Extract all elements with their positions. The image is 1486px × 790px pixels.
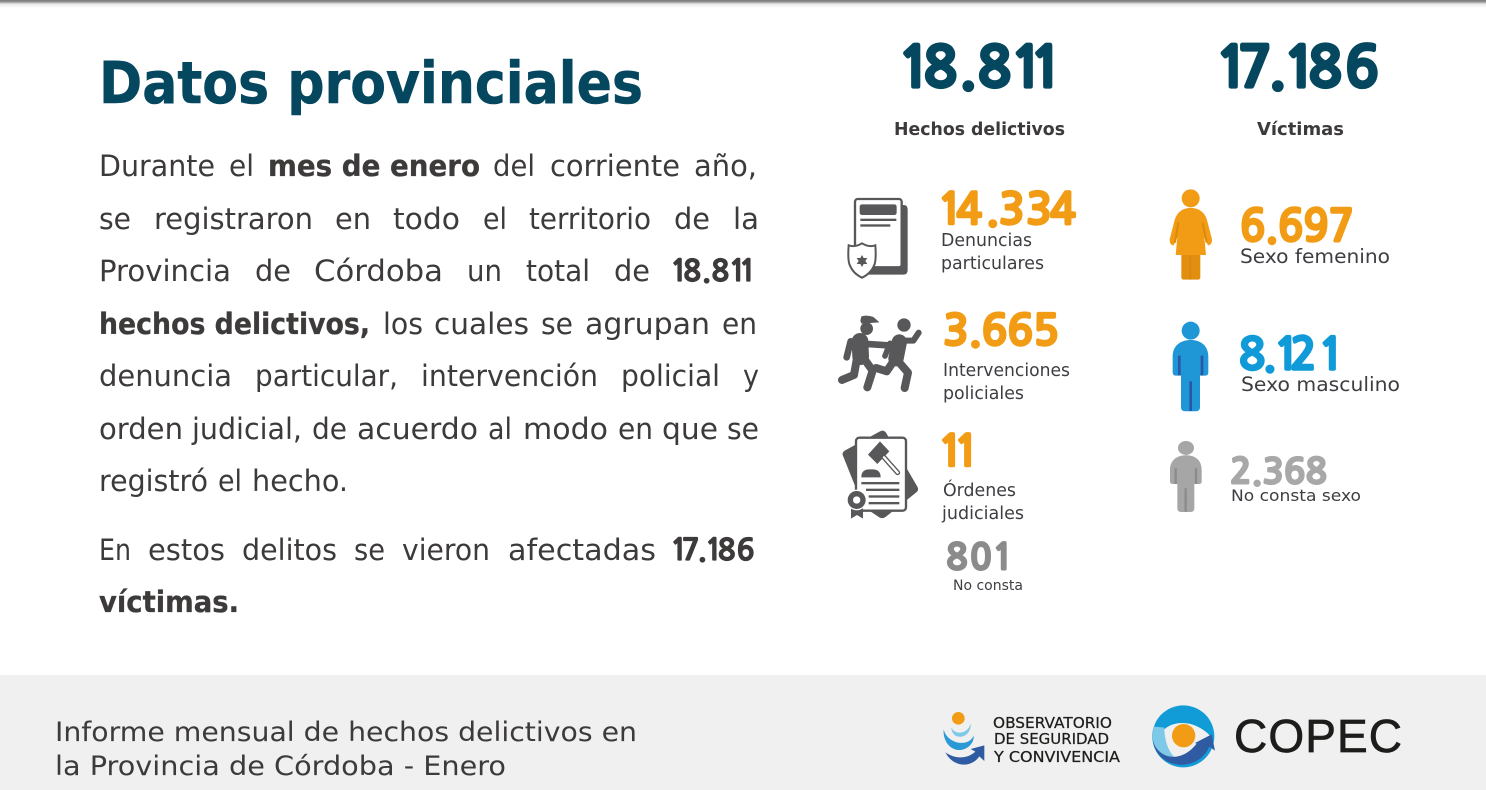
text block: main paragraph: hechos delictivos, xyxy=(99,307,370,341)
stat: sexo masculino xyxy=(1239,332,1400,396)
stat: denuncias particulares: Denuncias xyxy=(941,230,1032,251)
text block: victims paragraph: En xyxy=(99,533,131,567)
stat: denuncias particulares: particulares xyxy=(941,253,1044,274)
heading: victimas: Víctimas xyxy=(1257,119,1344,140)
stat: intervenciones policiales: policiales xyxy=(943,383,1024,404)
text block: main paragraph: y xyxy=(743,359,759,393)
stat: no consta xyxy=(946,540,1023,594)
text block: main paragraph: territorio xyxy=(529,202,651,236)
text block: main paragraph: año, xyxy=(694,149,757,183)
text block: main paragraph: los xyxy=(383,307,423,341)
text block: main paragraph: se xyxy=(99,202,131,236)
text block: main paragraph: Provincia xyxy=(99,254,231,288)
text block: victims paragraph: estos xyxy=(148,533,225,567)
text block: main paragraph: total xyxy=(526,254,590,288)
text block: main paragraph: Durante xyxy=(99,149,215,183)
stat: sexo femenino xyxy=(1240,204,1390,268)
text block: main paragraph: registraron xyxy=(154,202,313,236)
stat: sexo femenino: 6.697 xyxy=(1240,204,1354,248)
stat: no consta: 801 xyxy=(946,540,1014,576)
logo: observatorio: DE SEGURIDAD xyxy=(994,730,1109,748)
text block: main paragraph xyxy=(99,149,759,498)
text block: main paragraph: orden xyxy=(99,412,183,446)
footer text xyxy=(55,717,637,782)
text block: victims paragraph: víctimas. xyxy=(99,585,239,619)
stat: ordenes judiciales xyxy=(938,431,1024,524)
stat: intervenciones policiales xyxy=(943,311,1070,404)
footer text: la Provincia de Córdoba - Enero xyxy=(55,751,506,782)
stat: ordenes judiciales: Órdenes xyxy=(943,479,1016,501)
text block: main paragraph: hecho. xyxy=(252,464,348,498)
text block: main paragraph: agrupan xyxy=(585,307,710,341)
text block: main paragraph: la xyxy=(733,202,759,236)
text block: victims paragraph: vieron xyxy=(402,533,490,567)
text block: main paragraph: 18.811 xyxy=(670,257,757,286)
text block: main paragraph: del xyxy=(493,149,535,183)
icon: police officer and suspect running xyxy=(842,316,919,388)
text block: main paragraph: que xyxy=(662,412,718,446)
logo: observatorio: Y CONVIVENCIA xyxy=(993,748,1120,766)
text block: main paragraph: mes de enero xyxy=(268,149,480,183)
text block: main paragraph: todo xyxy=(393,202,460,236)
text block: main paragraph: en xyxy=(618,412,653,446)
stat: no consta sexo: 2.368 xyxy=(1230,456,1327,490)
logo: copec: COPEC xyxy=(1234,710,1402,762)
icon: female figure xyxy=(1170,189,1212,280)
text block: main paragraph: se xyxy=(727,412,759,446)
icon: judicial order xyxy=(843,431,918,519)
text block: main paragraph: cuales xyxy=(434,307,529,341)
stat: denuncias particulares xyxy=(937,189,1076,274)
panel: left text xyxy=(99,49,759,619)
text block: main paragraph: policial xyxy=(621,359,720,393)
stat: denuncias particulares: 14.334 xyxy=(937,189,1076,231)
text block: main paragraph: el xyxy=(218,464,242,498)
stat: ordenes judiciales: 11 xyxy=(938,431,980,473)
text block: victims paragraph: afectadas xyxy=(508,533,656,567)
stat: no consta sexo xyxy=(1230,456,1361,505)
heading: hechos delictivos: Hechos delictivos xyxy=(894,119,1065,140)
text block: main paragraph: Córdoba xyxy=(314,254,443,288)
stat: no consta: No consta xyxy=(953,578,1023,594)
text block: main paragraph: de xyxy=(312,412,347,446)
text block: main paragraph: de xyxy=(255,254,291,288)
text block: main paragraph: denuncia xyxy=(99,359,232,393)
panel: hechos delictivos xyxy=(842,41,1076,594)
text block: main paragraph: se xyxy=(541,307,573,341)
text block: main paragraph: acuerdo xyxy=(357,412,478,446)
text block: main paragraph: al xyxy=(488,412,512,446)
text block: main paragraph: modo xyxy=(523,412,608,446)
text block: main paragraph: de xyxy=(614,254,650,288)
icon: gray figure xyxy=(1170,441,1202,512)
footer band xyxy=(0,675,1486,790)
stat: sexo masculino: 8.121 xyxy=(1239,332,1345,376)
text block: main paragraph: particular, xyxy=(255,359,398,393)
title: Datos provinciales xyxy=(99,49,643,117)
text block: main paragraph: el xyxy=(229,149,254,183)
icon: police report xyxy=(848,199,908,278)
stat: sexo femenino: Sexo femenino xyxy=(1240,245,1390,268)
headline number: 18.811: 18.811 xyxy=(898,41,1063,96)
text block: main paragraph: en xyxy=(722,307,757,341)
text block: main paragraph: el xyxy=(483,202,507,236)
stat: intervenciones policiales: 3.665 xyxy=(943,311,1059,352)
logo: copec xyxy=(1152,705,1402,767)
panel: victimas xyxy=(1170,41,1400,512)
text block: victims paragraph: se xyxy=(354,533,385,567)
text block: main paragraph: en xyxy=(335,202,371,236)
footer text: Informe mensual de hechos delictivos en xyxy=(55,717,637,748)
text block: main paragraph: judicial, xyxy=(191,412,302,446)
logo: observatorio xyxy=(944,712,1120,766)
text block: victims paragraph: 17.186 xyxy=(670,536,754,565)
icon: male figure xyxy=(1173,322,1208,411)
stat: intervenciones policiales: Intervenciones xyxy=(943,360,1070,381)
text block: main paragraph: un xyxy=(467,254,502,288)
headline number: 17.186: 17.186 xyxy=(1215,41,1379,96)
stat: sexo masculino: Sexo masculino xyxy=(1241,373,1400,396)
text block: victims paragraph: delitos xyxy=(242,533,337,567)
logo: observatorio: OBSERVATORIO xyxy=(993,714,1112,732)
text block: main paragraph: intervención xyxy=(421,359,598,393)
text block: victims paragraph xyxy=(99,533,754,619)
text block: main paragraph: registró xyxy=(99,464,208,498)
stat: no consta sexo: No consta sexo xyxy=(1231,486,1361,505)
text block: main paragraph: corriente xyxy=(550,149,680,183)
text block: main paragraph: de xyxy=(674,202,710,236)
stat: ordenes judiciales: judiciales xyxy=(941,503,1024,524)
